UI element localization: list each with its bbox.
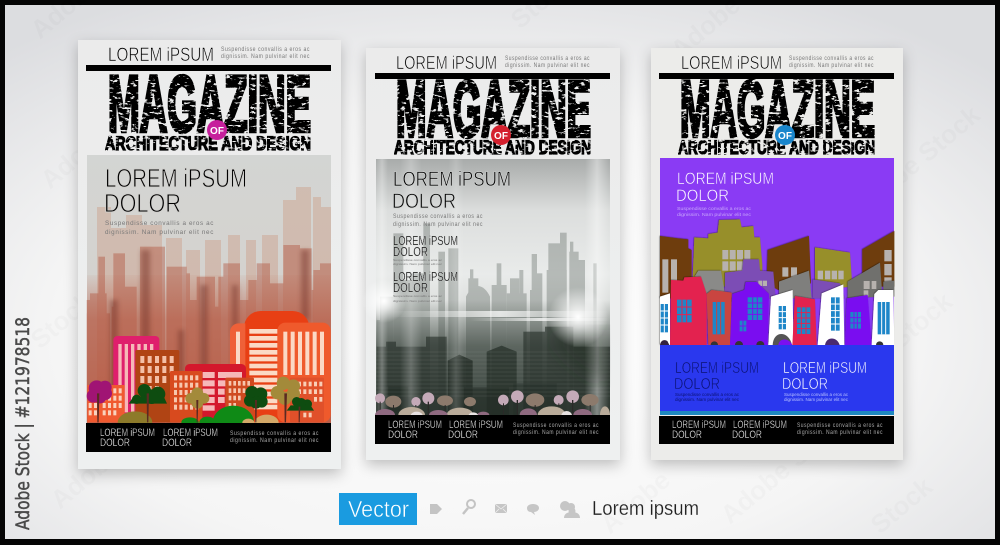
cover 2 footer band: DOLOR	[448, 429, 478, 441]
cover 2 light effects	[362, 159, 610, 416]
cover 2 headlines: DOLOR	[393, 281, 428, 295]
cover 1 magazine wordmark: ARCHITECTURE AND DESIGN	[105, 134, 311, 155]
panel: magazine cover 2: MAGAZINE	[396, 64, 591, 153]
cover 1 artwork	[87, 155, 331, 439]
cover 2 paper	[366, 48, 620, 460]
cover 3 headlines: dignissim. Nam pulvinar elit nec	[784, 397, 849, 402]
cover 3 arches	[660, 334, 883, 349]
cover 3 masthead line: Suspendisse convallis a eros ac	[789, 56, 874, 62]
cover 1 OF badge: OF	[210, 126, 224, 137]
stock id vertical label: Adobe Stock | #121978518	[12, 317, 34, 530]
cover 3 masthead line	[681, 53, 874, 73]
cover 1 footer band: LOREM iPSUM	[163, 427, 218, 439]
cover 1 footer band: DOLOR	[162, 437, 192, 449]
cover 2 headlines: Suspendisse convallis a eros ac	[393, 214, 483, 220]
cover 1 hills	[118, 406, 279, 439]
cover 3 magazine wordmark	[678, 64, 875, 159]
cover 2 headlines	[392, 168, 511, 303]
cover 2 OF badge: OF	[494, 131, 508, 142]
cover 3 footer band: DOLOR	[732, 429, 762, 441]
cover 1 pale upper skyline	[97, 187, 331, 423]
cover 1 footer band: LOREM iPSUM	[100, 427, 155, 439]
cover 3 OF badge	[775, 125, 795, 145]
cover 3 headlines: DOLOR	[782, 376, 828, 393]
cover 1 trees	[87, 377, 314, 422]
cover 2 headlines: LOREM iPSUM	[393, 234, 458, 248]
cover 1 headline	[104, 163, 247, 236]
panel: magazine cover 1	[78, 40, 341, 469]
cover 3 headlines: DOLOR	[676, 186, 729, 205]
cover 2 headlines: dignissim. Nam pulvinar elit nec	[393, 222, 483, 228]
cover 2 artwork	[362, 159, 610, 424]
cover 3 headlines: Suspendisse convallis a eros ac	[784, 392, 849, 397]
cover 2 headlines: Suspendisse convallis a eros ac	[393, 258, 443, 262]
panel: magazine cover 3	[12, 48, 903, 530]
cover 3 headlines: LOREM iPSUM	[675, 360, 759, 377]
cover 3 paper	[651, 48, 903, 460]
cover 1 colourful buildings	[87, 311, 331, 439]
icon: magnifier	[463, 500, 475, 514]
cover 2 footer band: DOLOR	[388, 429, 418, 441]
cover 3 artwork	[659, 158, 894, 444]
cover 3 headlines: LOREM iPSUM	[677, 169, 774, 188]
cover 1 headline: DOLOR	[104, 188, 181, 218]
cover 2 footer band: LOREM iPSUM	[449, 419, 503, 431]
cover 2 magazine wordmark: ARCHITECTURE AND DESIGN	[394, 138, 591, 159]
cover 1 OF badge	[207, 120, 227, 140]
cover 3 footer band: LOREM iPSUM	[672, 419, 726, 431]
cover 2 headlines: LOREM iPSUM	[393, 270, 458, 284]
cover 2 window stripes	[376, 352, 610, 396]
cover 1 headline: LOREM iPSUM	[105, 163, 247, 193]
cover 3 headlines: LOREM iPSUM	[783, 360, 867, 377]
icon: play tag	[430, 504, 442, 514]
cover 2 headlines: DOLOR	[393, 245, 428, 259]
cover 1 translucent skyline	[87, 245, 331, 423]
cover 2 headlines: dignissim. Nam pulvinar elit nec	[393, 262, 443, 266]
cover 2 masthead line: Suspendisse convallis a eros ac	[505, 56, 590, 62]
cover 1 magazine wordmark	[105, 59, 311, 155]
cover 1 black rule	[86, 65, 331, 71]
cover 1 paper	[78, 40, 341, 469]
cover 3 front buildings	[660, 277, 894, 349]
cover 3 headlines: Suspendisse convallis a eros ac	[677, 206, 752, 211]
cover 3 black rule	[659, 73, 894, 79]
cover 3 blue band	[660, 345, 894, 411]
panel: magazine cover 2	[362, 48, 620, 460]
cover 1 footer band: dignissim. Nam pulvinar elit nec	[230, 438, 319, 444]
cover 2 headlines: Suspendisse convallis a eros ac	[393, 294, 443, 298]
cover 2 footer band	[375, 415, 610, 444]
cover 1 headline: Suspendisse convallis a eros ac	[105, 221, 214, 227]
cover 2 masthead line: dignissim. Nam pulvinar elit nec	[505, 63, 590, 69]
cover 2 footer band: LOREM iPSUM	[388, 419, 442, 431]
cover 2 trees	[375, 390, 610, 424]
cover 3 OF badge: OF	[778, 131, 792, 142]
cover 1 headline: dignissim. Nam pulvinar elit nec	[105, 230, 214, 236]
cover 2 translucent skyline	[377, 223, 597, 415]
cover 3 footer band: Suspendisse convallis a eros ac	[797, 423, 883, 429]
cover 3 masthead line: LOREM iPSUM	[681, 53, 782, 73]
cover 3 teal strip	[660, 411, 894, 415]
cover 1 masthead line	[108, 45, 310, 66]
cover 3 headlines: DOLOR	[674, 376, 720, 393]
cover 3 back buildings	[660, 219, 894, 298]
cover 2 dark buildings	[377, 327, 610, 415]
cover 2 masthead line: LOREM iPSUM	[396, 53, 497, 73]
cover 1 dark verticals	[110, 250, 309, 420]
cover 3 headlines: dignissim. Nam pulvinar elit nec	[675, 397, 740, 402]
cover 1 masthead line: Suspendisse convallis a eros ac	[221, 47, 310, 53]
cover 3 headlines	[674, 169, 867, 402]
icon: speech bubble	[527, 504, 539, 515]
cover 2 footer band: Suspendisse convallis a eros ac	[513, 423, 599, 429]
panel: magazine cover 1: MAGAZINE	[108, 59, 311, 148]
cover 1 footer band: DOLOR	[100, 437, 130, 449]
cover 1 masthead line: LOREM iPSUM	[108, 45, 214, 66]
cover 3 magazine wordmark: ARCHITECTURE AND DESIGN	[678, 138, 875, 159]
caption: Lorem ipsum	[592, 498, 699, 520]
cover 2 headlines: dignissim. Nam pulvinar elit nec	[393, 299, 443, 303]
cover 1 lower tint	[87, 275, 331, 423]
cover 3 headlines: dignissim. Nam pulvinar elit nec	[677, 212, 752, 217]
cover 1 masthead line: dignissim. Nam pulvinar elit nec	[221, 54, 310, 60]
cover 2 headlines: DOLOR	[392, 190, 456, 213]
cover 1 footer band: Suspendisse convallis a eros ac	[230, 431, 319, 437]
cover 3 masthead line: dignissim. Nam pulvinar elit nec	[789, 63, 874, 69]
cover 2 black rule	[375, 73, 610, 79]
icon: person with cloud	[560, 501, 580, 518]
vector badge: Vector	[348, 496, 409, 522]
cover 2 masthead line	[396, 53, 590, 73]
cover 3 footer band: LOREM iPSUM	[733, 419, 787, 431]
vector badge	[339, 493, 417, 525]
icon: envelope	[495, 504, 507, 513]
cover 3 footer band	[659, 416, 894, 444]
cover 2 OF badge	[491, 125, 511, 145]
cover 3 footer band: dignissim. Nam pulvinar elit nec	[797, 430, 883, 436]
cover 2 footer band: dignissim. Nam pulvinar elit nec	[513, 430, 599, 436]
cover 3 headlines: Suspendisse convallis a eros ac	[675, 392, 740, 397]
cover 2 lower darkening	[376, 300, 610, 416]
cover 3 footer band: DOLOR	[672, 429, 702, 441]
cover 1 footer band	[86, 423, 331, 452]
cover 2 headlines: LOREM iPSUM	[393, 168, 511, 191]
cover 2 magazine wordmark	[394, 64, 591, 159]
